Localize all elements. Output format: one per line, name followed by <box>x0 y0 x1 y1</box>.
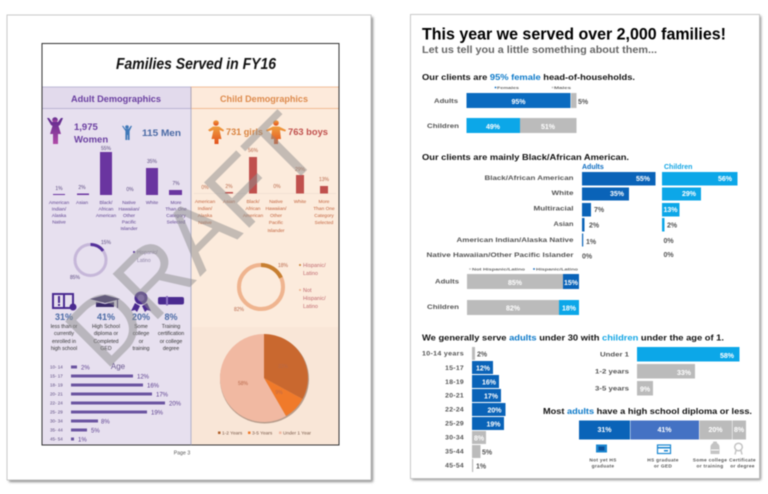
icon: graduate or GED <box>658 445 670 454</box>
text: education labels: Some college <box>693 458 727 464</box>
panel: adult demographics background <box>42 87 191 445</box>
bar chart: adult race: American <box>96 213 116 219</box>
bar chart: adult age: 35-44 <box>445 448 464 456</box>
icon: backpack <box>710 442 720 454</box>
bar chart: adult age: 20% <box>487 408 502 414</box>
donut chart: child ethnicity: Latino <box>303 271 318 277</box>
text: education labels: or degree <box>730 464 755 470</box>
bar chart: adult race: Category <box>166 213 186 219</box>
donut chart: child ethnicity <box>234 263 326 313</box>
text block: education labels: Training <box>162 324 180 330</box>
bar chart: adult age <box>422 347 506 472</box>
bar chart: adult race: African <box>99 206 114 212</box>
bar chart: gender: 49% <box>486 124 501 131</box>
bar chart: adult age: 8% <box>101 420 110 426</box>
bar chart: adult age: 18-19 <box>445 379 464 386</box>
donut chart: child ethnicity: Latino <box>303 304 318 310</box>
title: This year we served over 2,000 families! <box>422 26 726 44</box>
bar chart: adult age: 22-24 <box>445 406 464 414</box>
bar chart: race: 0% <box>664 238 674 245</box>
donut chart: adult ethnicity: Hispanic/ <box>137 250 158 256</box>
bar chart: adult age: 5% <box>91 428 100 434</box>
bar chart: adult race: Than One <box>165 206 187 212</box>
watermark: DRAFT: DRAFT <box>46 93 338 386</box>
bar chart: adult race: 2% <box>78 185 86 191</box>
bar chart: race: 13% <box>663 207 678 214</box>
text: education labels: or GED <box>654 464 672 470</box>
text block: education labels: currently <box>54 331 74 337</box>
bar chart: child age: 1-2 years <box>595 368 629 376</box>
bar chart: adult age: 45- 54 <box>50 436 63 442</box>
bar chart: child race: 0% <box>273 184 281 190</box>
bar chart: adult race: Black/ <box>99 200 113 206</box>
bar chart: child race: White <box>294 199 306 205</box>
bar chart: child race: 0% <box>201 185 209 191</box>
donut chart: adult ethnicity: 15% <box>101 240 112 246</box>
bar chart: adult age: 20% <box>169 402 182 408</box>
icon: certificate <box>735 443 742 454</box>
bar chart: ethnicity: 15% <box>564 280 579 287</box>
text block: education labels <box>51 324 184 352</box>
icon: graduation cap <box>90 295 120 308</box>
text: page number: Page 3 <box>174 450 190 456</box>
text block: education labels: High School <box>92 324 120 330</box>
bar chart: gender: Males <box>554 85 572 90</box>
bar chart: child race: Native <box>198 220 212 226</box>
bar chart: adult race: Native <box>122 200 136 206</box>
bar chart: adult age: 1% <box>476 464 487 470</box>
bar chart: ethnicity: Children <box>427 304 459 311</box>
bar chart: gender: Females <box>497 85 520 90</box>
bar chart: child race: Other <box>270 213 282 219</box>
bar chart: child race: 29% <box>295 167 306 173</box>
text block: education labels: Completed <box>93 339 119 345</box>
bar chart: race: 29% <box>682 191 697 198</box>
bar chart: race: 0% <box>664 252 674 259</box>
stat: women count: Women <box>74 134 108 146</box>
bar chart: child race: Black/ <box>246 199 260 205</box>
text block: education labels: or <box>139 339 144 345</box>
bar chart: adult race: American <box>49 200 69 206</box>
bar chart: ethnicity: Hispanic/Latino <box>536 266 579 272</box>
bar chart: gender: Adults <box>434 98 458 105</box>
stat: women count: 1,975 <box>74 122 98 133</box>
bar chart: race: Native Hawaiian/Other Pacific Islander <box>426 252 574 259</box>
donut chart: child ethnicity: Not <box>303 288 312 294</box>
bar chart: race: American Indian/Alaska Native <box>456 237 574 244</box>
inner page frame <box>42 44 339 445</box>
bar chart: child race: Pacific <box>269 220 284 226</box>
bar chart: race: 2% <box>589 222 600 230</box>
bar chart: adult age: 10-14 years <box>422 350 464 358</box>
bar chart: adult age: 12% <box>137 374 150 380</box>
stat: men count: 115 Men <box>142 128 181 139</box>
stat: girls count: 731 girls <box>226 127 263 138</box>
stat: women count <box>74 122 108 146</box>
text block: education labels: less than or <box>51 324 78 330</box>
bar chart: child race: 13% <box>319 177 330 183</box>
pie chart: child age: Under 1 Year <box>283 430 311 436</box>
icon: boy <box>266 120 286 144</box>
bar chart: child age: 9% <box>640 386 651 394</box>
heading band: adult demographics: Adult Demographics <box>71 94 161 104</box>
text block: education labels: or college <box>160 339 182 345</box>
text: education labels: Not yet HS <box>589 458 617 464</box>
bar chart: adult age: 20- 21 <box>50 392 63 396</box>
bar chart: ethnicity <box>427 266 579 315</box>
bar chart: child race <box>194 148 336 234</box>
bar chart: ethnicity: Not Hispanic/Latino <box>472 266 526 272</box>
text: education labels: HS graduate <box>647 458 679 464</box>
bar chart: race: Adults <box>582 164 604 171</box>
subtitle: Let us tell you a little something about them... <box>422 45 657 56</box>
bar chart: adult race: More <box>171 200 182 206</box>
heading: education: Most adults have a high school diploma or less. <box>543 406 752 416</box>
text block: education labels: college <box>133 331 149 337</box>
bar chart: adult age: 10- 14 <box>50 364 63 370</box>
icon: woman <box>47 117 63 144</box>
pie chart: child age: 3-5 Years <box>252 430 273 436</box>
bar chart: adult age: 25- 29 <box>50 410 63 414</box>
bar chart: adult age: 1% <box>78 438 87 444</box>
text block: education labels: Some <box>134 324 148 330</box>
stacked bar: education: 31% <box>597 427 612 434</box>
bar chart: adult race: Other <box>123 213 135 219</box>
text block: education labels: enrolled in <box>52 339 76 345</box>
pie chart: child age: 33% <box>278 364 289 370</box>
bar chart: child race: Selected <box>315 220 334 226</box>
bar chart: adult age: 16% <box>147 384 160 390</box>
bar chart: race: 1% <box>586 239 597 246</box>
bar chart: adult age: 45-54 <box>445 462 464 470</box>
donut chart: child ethnicity: 18% <box>278 263 289 269</box>
icon: not yet graduated <box>53 294 76 310</box>
bar chart: race: 2% <box>667 222 678 230</box>
bar chart: child race: 56% <box>248 148 259 154</box>
pie chart: child age: 1-2 Years <box>222 430 243 436</box>
bar chart: adult age: 30- 34 <box>50 418 63 424</box>
text block: education labels: degree <box>163 346 179 352</box>
bar chart: child age: 58% <box>720 353 735 360</box>
bar chart: child race: American <box>243 213 263 219</box>
text: education labels: graduate <box>592 464 614 470</box>
bar chart: child race: Than One <box>313 206 335 212</box>
bar chart: adult age: 17% <box>156 392 169 398</box>
pie chart: child age: 9% <box>275 390 283 396</box>
bar chart: adult race: 35% <box>147 159 158 165</box>
bar chart: ethnicity: Adults <box>435 278 459 286</box>
bar chart: adult race: Indian/ <box>52 206 67 212</box>
pie chart: child age <box>192 327 338 444</box>
bar chart: child race: Native <box>269 199 283 205</box>
heading band: adult demographics <box>42 87 191 108</box>
bar chart: race: 0% <box>582 254 593 260</box>
stacked bar: education: 41% <box>657 427 672 434</box>
bar chart: child race: 2% <box>225 184 233 190</box>
bar chart: child race: African <box>246 206 261 212</box>
icon: not yet graduate <box>596 444 607 452</box>
bar chart: adult age: 15- 17 <box>50 374 63 378</box>
icon: ribbon <box>131 292 151 312</box>
bar chart: child age: 3-5 years <box>595 386 629 392</box>
pie chart: child age: 58% <box>238 381 249 387</box>
bar chart: adult race: Alaska <box>52 213 67 219</box>
bar chart: race: 35% <box>610 191 625 198</box>
bar chart: adult race: Native <box>52 220 66 226</box>
bar chart: ethnicity: 85% <box>508 280 523 287</box>
bar chart: adult race: 1% <box>55 186 63 192</box>
bar chart: adult age: 22- 24 <box>50 400 63 406</box>
donut chart: adult ethnicity: Latino <box>137 258 151 264</box>
heading band: child demographics: Child Demographics <box>220 94 308 104</box>
bar chart: adult age: 19% <box>151 410 164 416</box>
donut chart: child ethnicity: Hispanic/ <box>303 263 326 269</box>
bar chart: race: 56% <box>718 176 733 183</box>
bar chart: adult race: Selected <box>167 220 186 226</box>
bar chart: adult race: 7% <box>172 181 180 187</box>
bar chart: child race: Category <box>314 213 334 219</box>
bar chart: adult age: 17% <box>484 394 499 400</box>
bar chart: adult race: 55% <box>101 146 112 152</box>
bar chart: adult age: 15-17 <box>445 365 464 372</box>
bar chart: race: 7% <box>594 207 605 214</box>
bar chart: adult age: 2% <box>477 352 488 358</box>
bar chart: gender: Children <box>427 123 459 130</box>
panel: draft report page <box>7 15 373 482</box>
donut chart: adult ethnicity: 85% <box>70 275 81 281</box>
title: Families Served in FY16: Families Served in FY16 <box>116 56 276 73</box>
bar chart: adult age: 16% <box>482 380 497 386</box>
statistic: education percentages: 31% <box>55 312 73 322</box>
bar chart: adult race <box>49 146 187 232</box>
bar chart: gender: 5% <box>578 99 589 106</box>
bar chart: adult age: 30-34 <box>445 434 464 442</box>
donut chart: child ethnicity: 82% <box>234 307 245 313</box>
bar chart: race: Children <box>664 164 692 171</box>
bar chart: child age: 33% <box>677 370 692 377</box>
text: education labels: or training <box>696 464 724 470</box>
bar chart: race: White <box>552 190 574 197</box>
donut chart: adult ethnicity <box>70 240 158 281</box>
bar chart: gender: 95% <box>511 99 526 106</box>
bar chart: adult race: 0% <box>126 187 134 193</box>
text block: education labels: diploma or <box>94 331 118 337</box>
bar chart: adult race: Hawaiian/ <box>118 206 140 212</box>
bar chart: ethnicity: 82% <box>506 306 521 312</box>
bar chart: child race: Islander <box>267 228 285 234</box>
bar chart: child race: Alaska <box>198 213 213 219</box>
bar chart: adult age: 18- 19 <box>50 382 63 388</box>
stacked bar: education <box>579 420 746 440</box>
bar chart: adult race: Asian <box>76 200 88 206</box>
text block: education labels: GED <box>100 346 112 352</box>
bar chart: adult age: 2% <box>81 366 90 372</box>
bar chart: adult age: 5% <box>482 450 493 456</box>
donut chart: child ethnicity: Hispanic/ <box>303 296 326 302</box>
bar chart: gender: 51% <box>541 124 556 131</box>
stacked bar: education: 20% <box>708 427 723 434</box>
statistic: education percentages: 41% <box>97 312 115 322</box>
heading: race: Our clients are mainly Black/African American. <box>422 152 629 162</box>
bar chart: adult race: White <box>146 200 158 206</box>
icon: man <box>122 125 132 140</box>
bar chart: child race: Indian/ <box>198 206 213 212</box>
heading: gender: Our clients are 95% female head-of-households. <box>422 72 635 82</box>
bar chart: adult age: 25-29 <box>445 420 464 428</box>
bar chart: adult age: 35- 44 <box>50 428 63 432</box>
bar chart: adult race: Pacific <box>122 220 137 226</box>
bar chart: child race: More <box>319 199 330 205</box>
bar chart: adult age: Age <box>111 362 126 371</box>
text block: education labels: training <box>132 346 150 352</box>
bar chart: race: Asian <box>554 221 574 228</box>
icon: girl <box>208 120 224 144</box>
icon: diploma <box>158 296 184 306</box>
bar chart: adult age: 20-21 <box>445 392 464 400</box>
stacked bar: education: 8% <box>734 427 745 434</box>
bar chart: child age <box>595 347 740 396</box>
bar chart: child race: Asian <box>223 199 235 205</box>
bar chart: child age: Under 1 <box>600 352 629 358</box>
statistic: education percentages <box>55 312 178 322</box>
text: education labels <box>589 458 756 470</box>
text block: education labels: certification <box>158 331 184 337</box>
bar chart: race: Multiracial <box>534 206 574 212</box>
text block: education labels: high school <box>51 346 77 352</box>
bar chart: adult age: 8% <box>474 436 485 442</box>
heading: age: We generally serve adults under 30 with children under the age of 1. <box>422 332 724 342</box>
bar chart: child race: Hawaiian/ <box>265 206 287 212</box>
bar chart: race <box>426 164 738 260</box>
bar chart: child race: American <box>195 199 215 205</box>
stat: boys count: 763 boys <box>288 127 328 138</box>
panel: infographic page <box>410 14 761 480</box>
bar chart: ethnicity: 18% <box>562 306 577 312</box>
heading band: child demographics <box>191 87 339 108</box>
statistic: education percentages: 20% <box>132 312 150 322</box>
bar chart: adult age: 19% <box>486 422 501 428</box>
bar chart: gender <box>427 85 589 133</box>
bar chart: race: 55% <box>636 176 651 183</box>
bar chart: adult age: 12% <box>476 366 491 372</box>
statistic: education percentages: 8% <box>164 312 178 322</box>
bar chart: race: Black/African American <box>484 175 574 182</box>
bar chart: adult age <box>50 362 182 444</box>
bar chart: adult race: Islander <box>120 226 138 232</box>
panel: child demographics background <box>191 87 339 445</box>
text: education labels: Certificate <box>729 458 756 464</box>
